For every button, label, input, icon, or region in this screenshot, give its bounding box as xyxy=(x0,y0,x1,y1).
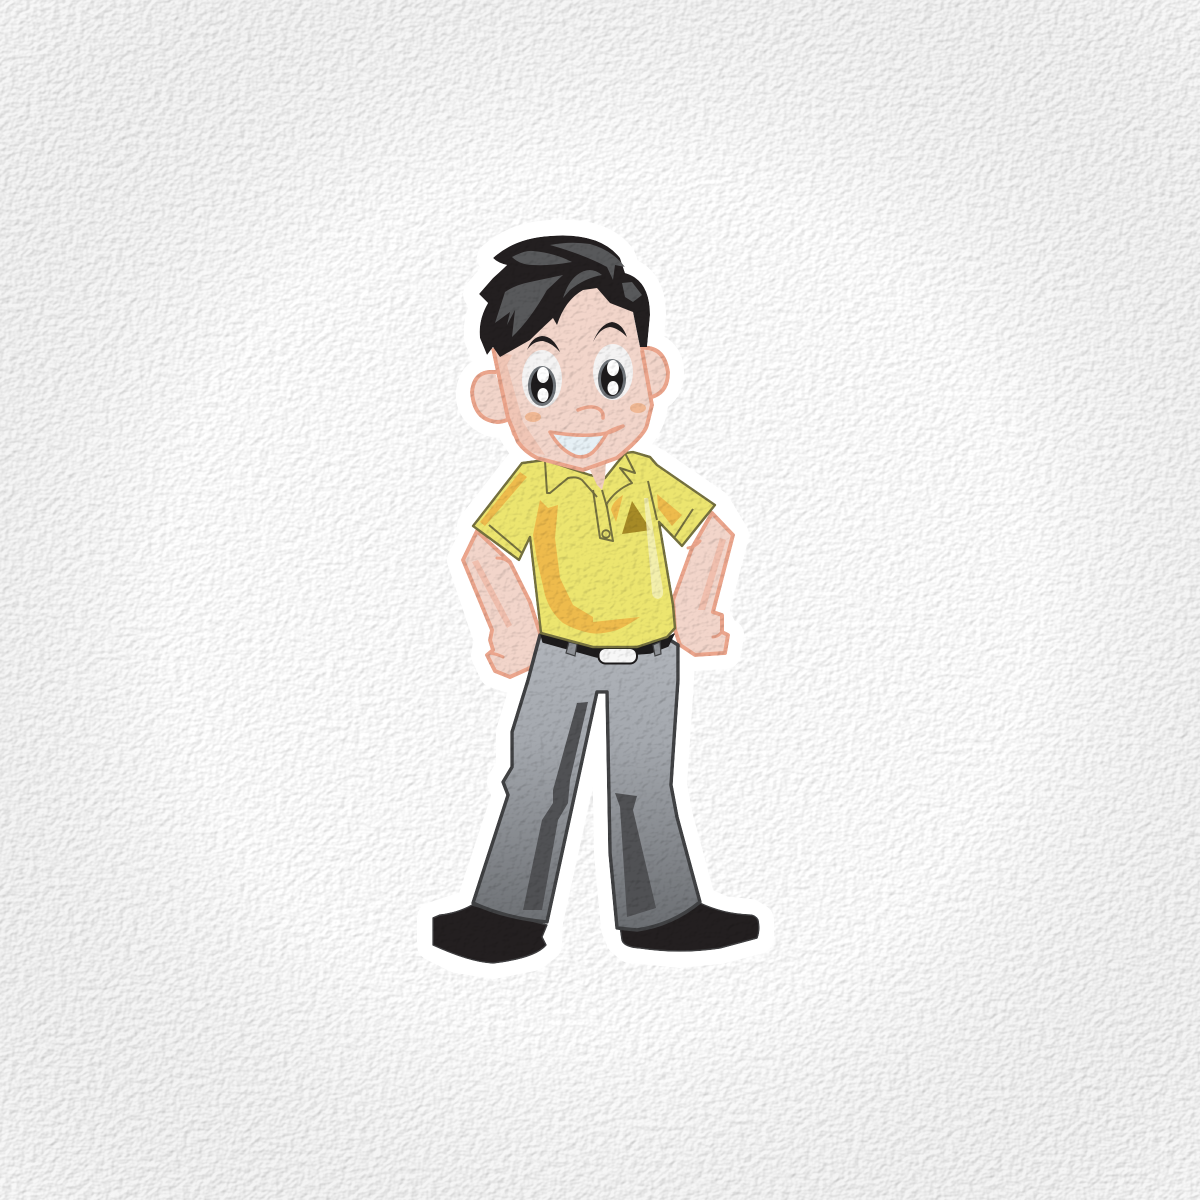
trouser crease right xyxy=(615,793,656,917)
belt loop right xyxy=(653,642,661,656)
ears xyxy=(472,348,668,422)
mouth xyxy=(550,426,623,457)
neck xyxy=(590,462,606,490)
shirt logo xyxy=(622,501,651,534)
right arm xyxy=(673,513,733,655)
belt xyxy=(541,634,674,664)
hair highlight side xyxy=(563,270,602,298)
right shoe xyxy=(620,903,759,951)
shirt xyxy=(473,452,715,647)
belt buckle xyxy=(598,648,637,664)
trousers xyxy=(473,635,700,930)
button xyxy=(602,530,610,538)
face skin xyxy=(493,270,652,470)
trouser crease left xyxy=(523,702,588,910)
cheek left xyxy=(525,412,541,422)
sleeve hem right xyxy=(674,509,693,538)
right eye xyxy=(593,344,633,400)
sleeve hem left xyxy=(489,525,522,553)
sleeve shadow left xyxy=(480,472,527,526)
hair highlight top xyxy=(550,243,625,280)
left eye xyxy=(522,350,562,408)
hair highlight fringe xyxy=(495,275,563,337)
hair xyxy=(479,235,650,357)
shirt shadow xyxy=(533,500,640,634)
shirt body xyxy=(473,452,715,647)
hair highlight front xyxy=(512,251,572,265)
right collar xyxy=(606,453,635,505)
sleeve shadow right xyxy=(657,494,682,526)
left arm xyxy=(463,531,541,677)
right eyebrow xyxy=(593,322,627,342)
face xyxy=(493,270,652,470)
nose xyxy=(578,407,603,418)
shirt side seam xyxy=(648,481,657,520)
belt loop left xyxy=(566,642,577,656)
face shading xyxy=(495,352,545,455)
left shoe xyxy=(433,905,547,963)
character xyxy=(433,235,759,963)
cheek right xyxy=(630,403,646,413)
face outline xyxy=(493,348,652,470)
shirt highlight xyxy=(644,498,663,599)
chest shadow xyxy=(611,495,623,522)
hair highlight back xyxy=(622,282,642,302)
sticker inner fill xyxy=(520,540,680,690)
left collar xyxy=(545,461,597,497)
white sticker border xyxy=(433,235,758,963)
left eyebrow xyxy=(527,336,560,352)
placket xyxy=(593,490,613,541)
